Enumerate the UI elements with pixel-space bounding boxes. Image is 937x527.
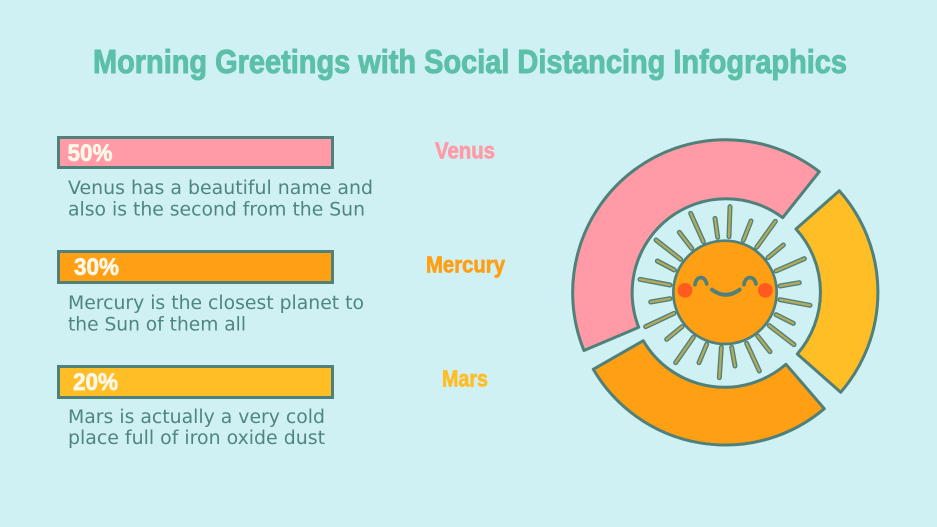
smile xyxy=(712,290,740,295)
donut segment: Mars 20% xyxy=(796,191,878,392)
donut segment: Venus 50% xyxy=(573,140,819,350)
panel: Venus row xyxy=(58,138,373,220)
panel: Mercury row xyxy=(58,252,364,336)
panel: Mars row xyxy=(58,366,332,449)
donut segment: Mercury 30% xyxy=(593,341,824,445)
Venus bar xyxy=(58,138,332,168)
right eye xyxy=(744,278,756,285)
Mercury percentage: 30% xyxy=(74,254,119,281)
Mars description: place full of iron oxide dust xyxy=(68,428,325,449)
Venus description: Venus has a beautiful name and xyxy=(68,178,373,199)
Mars description xyxy=(68,407,325,449)
Mars description: Mars is actually a very cold xyxy=(68,407,325,428)
right cheek xyxy=(758,283,773,298)
Mercury description xyxy=(68,293,364,336)
icon: sun xyxy=(640,207,810,378)
Mars bar xyxy=(58,366,332,398)
Venus percentage: 50% xyxy=(68,140,112,167)
Mercury description: the Sun of them all xyxy=(68,314,246,336)
sun disc xyxy=(673,241,777,344)
Mars percentage: 20% xyxy=(73,369,118,396)
donut chart with sun xyxy=(573,140,878,445)
Venus description: also is the second from the Sun xyxy=(68,200,365,220)
Mercury bar xyxy=(58,252,332,282)
Venus description xyxy=(68,178,373,220)
Mercury description: Mercury is the closest planet to xyxy=(68,293,364,314)
label: Mercury: Mercury xyxy=(426,252,505,278)
left eye xyxy=(695,278,707,285)
label: Mars: Mars xyxy=(442,366,488,392)
left cheek xyxy=(678,283,692,298)
sun rays outline xyxy=(640,207,810,378)
title: Morning Greetings with Social Distancing Infographics xyxy=(93,43,847,80)
sun rays fill xyxy=(640,207,810,378)
label: Venus: Venus xyxy=(435,138,495,164)
